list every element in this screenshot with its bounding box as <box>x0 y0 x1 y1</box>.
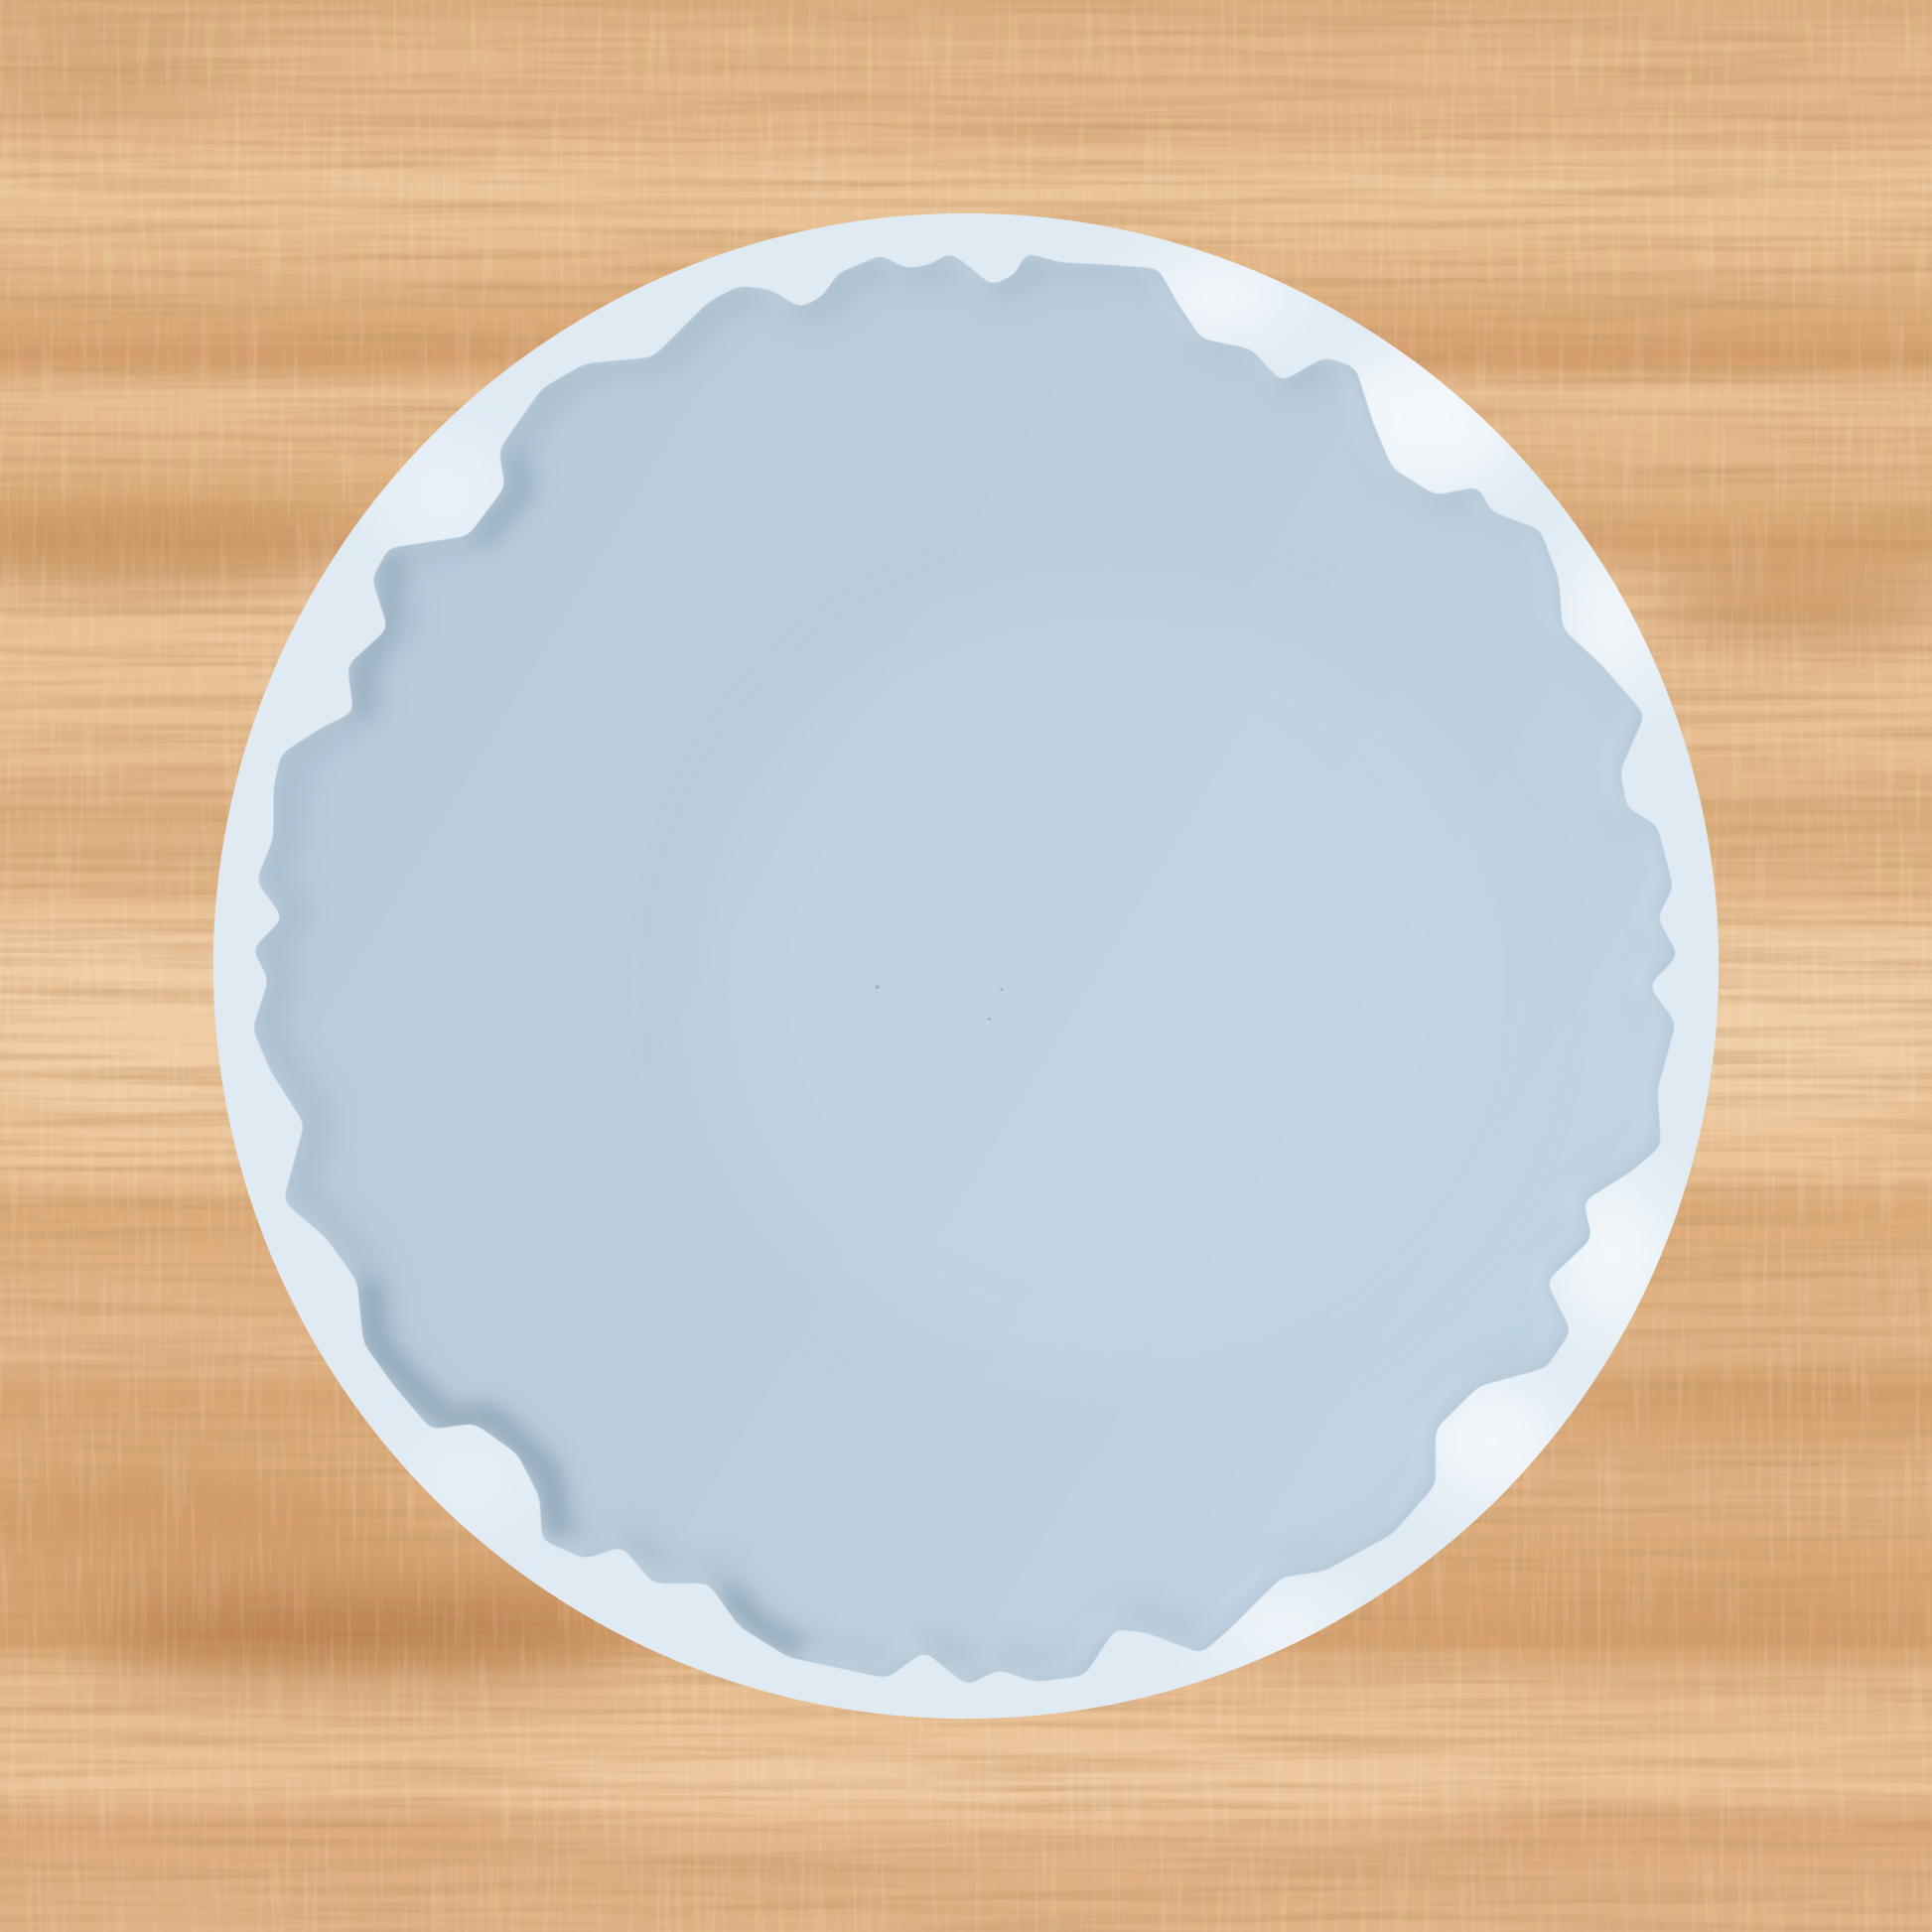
silicone mould outer disc <box>213 213 1719 1719</box>
small specks at the centre of the cavity <box>876 985 1003 1021</box>
inner resin cavity with wavy geode edge <box>240 245 1691 1686</box>
rim highlights <box>382 252 1676 1663</box>
inner shadow along the cavity wall <box>240 245 1691 1682</box>
